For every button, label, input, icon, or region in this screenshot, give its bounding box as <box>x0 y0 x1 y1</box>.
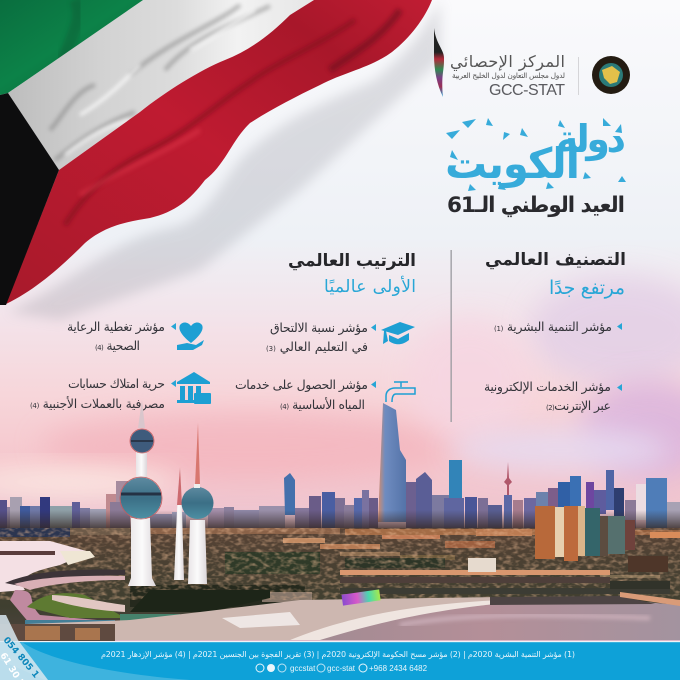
item: e-services <box>484 379 622 414</box>
distant skyline right <box>224 403 680 532</box>
item: bank accounts <box>30 376 176 412</box>
thin tower <box>174 467 184 580</box>
rating: مرتفع جدًا <box>549 277 625 299</box>
footer band <box>0 615 680 680</box>
item: water access: مؤشر الحصول على خدمات <box>235 377 368 393</box>
GCC-STAT logo: المركز الإحصائي <box>450 52 565 72</box>
GCC-STAT logo: GCC-STAT <box>489 82 565 99</box>
item: water access <box>235 377 376 412</box>
social contacts <box>256 664 428 673</box>
icon: water tap <box>386 382 415 402</box>
title: State of Kuwait: دولة <box>556 117 626 162</box>
item: health care: الصحية (4) <box>95 338 140 353</box>
bay and green park <box>0 541 270 630</box>
haze at building bases <box>0 510 680 530</box>
logo ribbon <box>434 28 444 97</box>
city skyline <box>0 400 680 641</box>
item: bank accounts: مصرفية بالعملات الأجنبية (4) <box>30 396 165 412</box>
item: higher education <box>266 320 376 355</box>
coastal neighbourhood lights <box>0 528 680 607</box>
distant skyline left <box>0 481 224 530</box>
texture of city lights <box>0 528 680 600</box>
main tower <box>120 400 162 586</box>
item: e-services: مؤشر الخدمات الإلكترونية <box>484 379 611 395</box>
ring road <box>340 558 670 594</box>
item: water access: المياه الأساسية (4) <box>280 397 365 412</box>
item: health care: مؤشر تغطية الرعاية <box>67 319 165 335</box>
panel: global classification <box>484 250 626 414</box>
title: State of Kuwait: الكويت <box>445 139 580 189</box>
divider <box>450 250 452 422</box>
Liberation tower <box>504 462 512 500</box>
GCC emblem <box>592 56 630 94</box>
item: higher education: مؤشر نسبة الالتحاق <box>270 320 368 336</box>
item: health care <box>67 319 176 353</box>
high-rise blocks <box>535 506 680 572</box>
GCC-STAT logo: لدول مجلس التعاون لدول الخليج العربية <box>452 71 565 80</box>
item: e-services: عبر الإنترنت(2) <box>546 398 611 414</box>
title: State of Kuwait <box>445 117 626 191</box>
shore and water <box>0 592 680 641</box>
social contacts: +968 2434 6482 <box>369 664 428 673</box>
icon: bank <box>177 372 211 404</box>
illuminated mall <box>341 589 381 606</box>
social contacts: gcc-stat <box>327 664 356 673</box>
social contacts: gccstat <box>290 664 316 673</box>
Al Hamra tower <box>378 403 406 522</box>
item: bank accounts: حرية امتلاك حسابات <box>68 376 165 392</box>
land <box>0 528 680 640</box>
subtitle: 61st national day: العيد الوطني الـ61 <box>447 193 625 218</box>
GCC-STAT logo <box>434 28 630 99</box>
tall slim tower <box>284 473 295 515</box>
corner numbers pattern: 054 805 1 <box>1 636 41 680</box>
corner numbers pattern <box>0 615 190 680</box>
heading: الترتيب العالمي <box>288 251 416 271</box>
references line: (1) مؤشر التنمية البشرية 2020م | (2) مؤشر مسح الحكومة الإلكترونية 2020م | (3) تقرير الفجوة بين الجنسين 2021م | (4) مؤشر الإزدهار 2021م <box>101 650 575 660</box>
icon: hand with heart <box>177 322 204 350</box>
heading: التصنيف العالمي <box>485 250 626 270</box>
Kuwait Towers <box>120 400 214 586</box>
item: higher education: في التعليم العالي (3) <box>266 339 368 355</box>
item: human development: مؤشر التنمية البشرية (1) <box>494 319 612 335</box>
rank: الأولى عالميًا <box>324 276 416 297</box>
second tower <box>182 423 214 584</box>
panel: global ranking <box>30 251 416 412</box>
icon: graduation cap <box>381 322 415 344</box>
flag of Kuwait <box>0 0 440 320</box>
